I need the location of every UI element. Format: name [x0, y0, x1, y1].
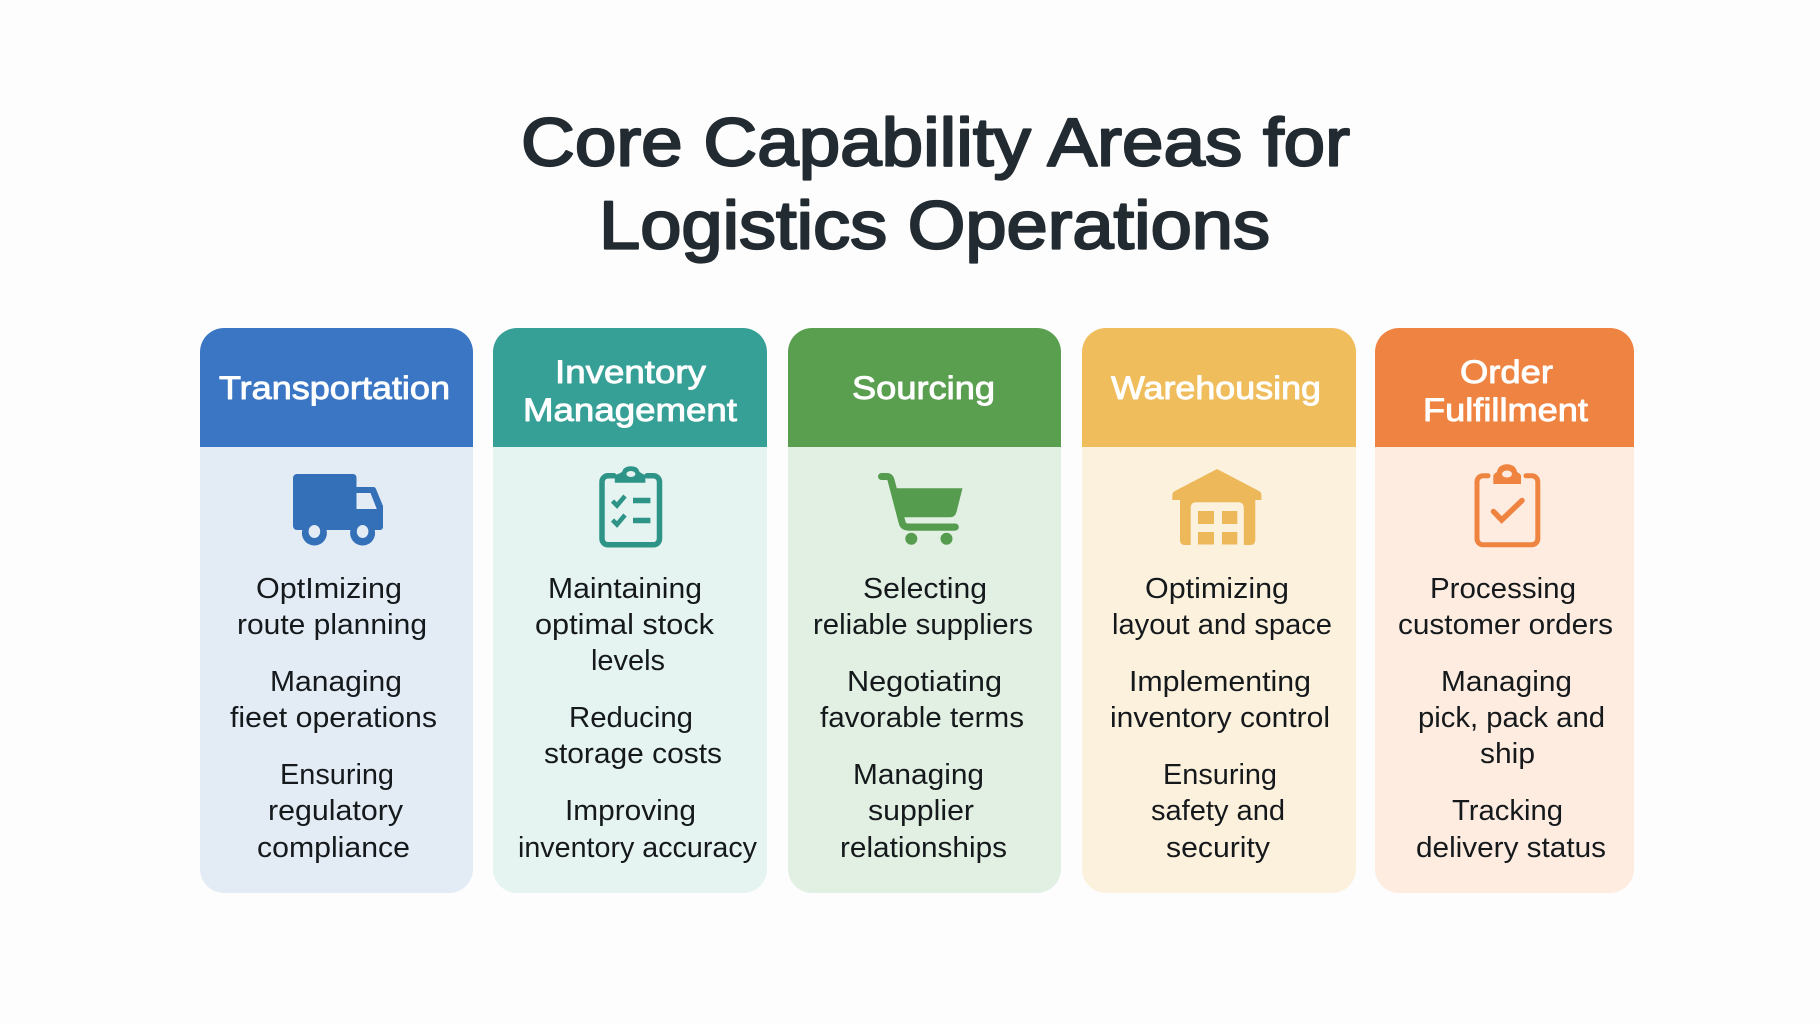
header: Transportation [200, 328, 473, 447]
header: Warehousing [1082, 328, 1356, 447]
text block: Inventory Management items: Reducing [569, 702, 693, 734]
header: Transportation: Transportation [219, 370, 450, 406]
icon: warehouse [1172, 469, 1261, 545]
title: Core Capability Areas for [521, 104, 1350, 180]
header: Warehousing: Warehousing [1111, 370, 1321, 406]
header: Order Fulfillment [1375, 328, 1634, 447]
text block: Warehousing items: Implementing [1129, 666, 1311, 698]
icon: delivery truck [293, 474, 383, 546]
panel: Inventory Management [493, 328, 767, 893]
header: Order Fulfillment: Fulfillment [1423, 392, 1588, 428]
text block: Transportation items: fieet operations [230, 702, 437, 734]
text block: Order Fulfillment items: delivery status [1416, 832, 1606, 864]
text block: Warehousing items: security [1166, 832, 1271, 864]
text block: Order Fulfillment items: pick, pack and [1418, 702, 1605, 734]
text block: Order Fulfillment items: customer orders [1398, 609, 1613, 641]
text block: Inventory Management items: Improving [565, 795, 696, 827]
text block: Order Fulfillment items [1398, 573, 1613, 864]
text block: Transportation items: Managing [270, 666, 402, 698]
panel: Transportation [200, 328, 473, 893]
icon: inventory checklist clipboard [602, 466, 660, 545]
icon: shopping cart [882, 476, 962, 545]
header: Order Fulfillment: Order [1460, 354, 1553, 390]
panel: Order Fulfillment [1375, 328, 1634, 893]
text block: Order Fulfillment items: Managing [1441, 666, 1572, 698]
panel: Sourcing [788, 328, 1061, 893]
text block: Warehousing items: Optimizing [1145, 573, 1289, 605]
text block: Sourcing items: supplier [868, 795, 975, 827]
header: Sourcing: Sourcing [852, 370, 995, 406]
text block: Order Fulfillment items: ship [1480, 738, 1535, 770]
text block: Inventory Management items: storage costs [544, 738, 722, 770]
text block: Sourcing items: relationships [840, 832, 1007, 864]
text block: Transportation items: regulatory [268, 795, 404, 827]
text block: Order Fulfillment items: Processing [1430, 573, 1576, 605]
text block: Order Fulfillment items: Tracking [1452, 795, 1563, 827]
text block: Warehousing items [1110, 573, 1332, 864]
text block: Warehousing items: layout and space [1112, 609, 1332, 641]
header: Sourcing [788, 328, 1061, 447]
text block: Warehousing items: inventory control [1110, 702, 1330, 734]
text block: Transportation items: Ensuring [280, 759, 394, 791]
icon: order clipboard with check [1477, 464, 1538, 545]
text block: Inventory Management items: levels [591, 645, 665, 677]
text block: Transportation items: compliance [257, 832, 410, 864]
text block: Warehousing items: Ensuring [1163, 759, 1277, 791]
text block: Warehousing items: safety and [1151, 795, 1285, 827]
text block: Transportation items: route planning [237, 609, 427, 641]
text block: Inventory Management items: optimal stock [535, 609, 715, 641]
text block: Sourcing items: Managing [853, 759, 984, 791]
title [521, 104, 1350, 264]
header: Inventory Management: Management [523, 392, 737, 428]
text block: Sourcing items: favorable terms [820, 702, 1024, 734]
panel: Warehousing [1082, 328, 1356, 893]
text block: Inventory Management items [518, 573, 758, 864]
title: Logistics Operations [599, 188, 1270, 264]
text block: Transportation items: OptImizing [256, 573, 402, 605]
text block: Inventory Management items: Maintaining [548, 573, 702, 605]
text block: Sourcing items [813, 573, 1033, 864]
text block: Transportation items [230, 573, 437, 864]
text block: Inventory Management items: inventory accuracy [518, 832, 758, 864]
text block: Sourcing items: reliable suppliers [813, 609, 1033, 641]
header: Inventory Management [493, 328, 767, 447]
header: Inventory Management: Inventory [555, 354, 707, 390]
text block: Sourcing items: Selecting [863, 573, 987, 605]
text block: Sourcing items: Negotiating [847, 666, 1002, 698]
